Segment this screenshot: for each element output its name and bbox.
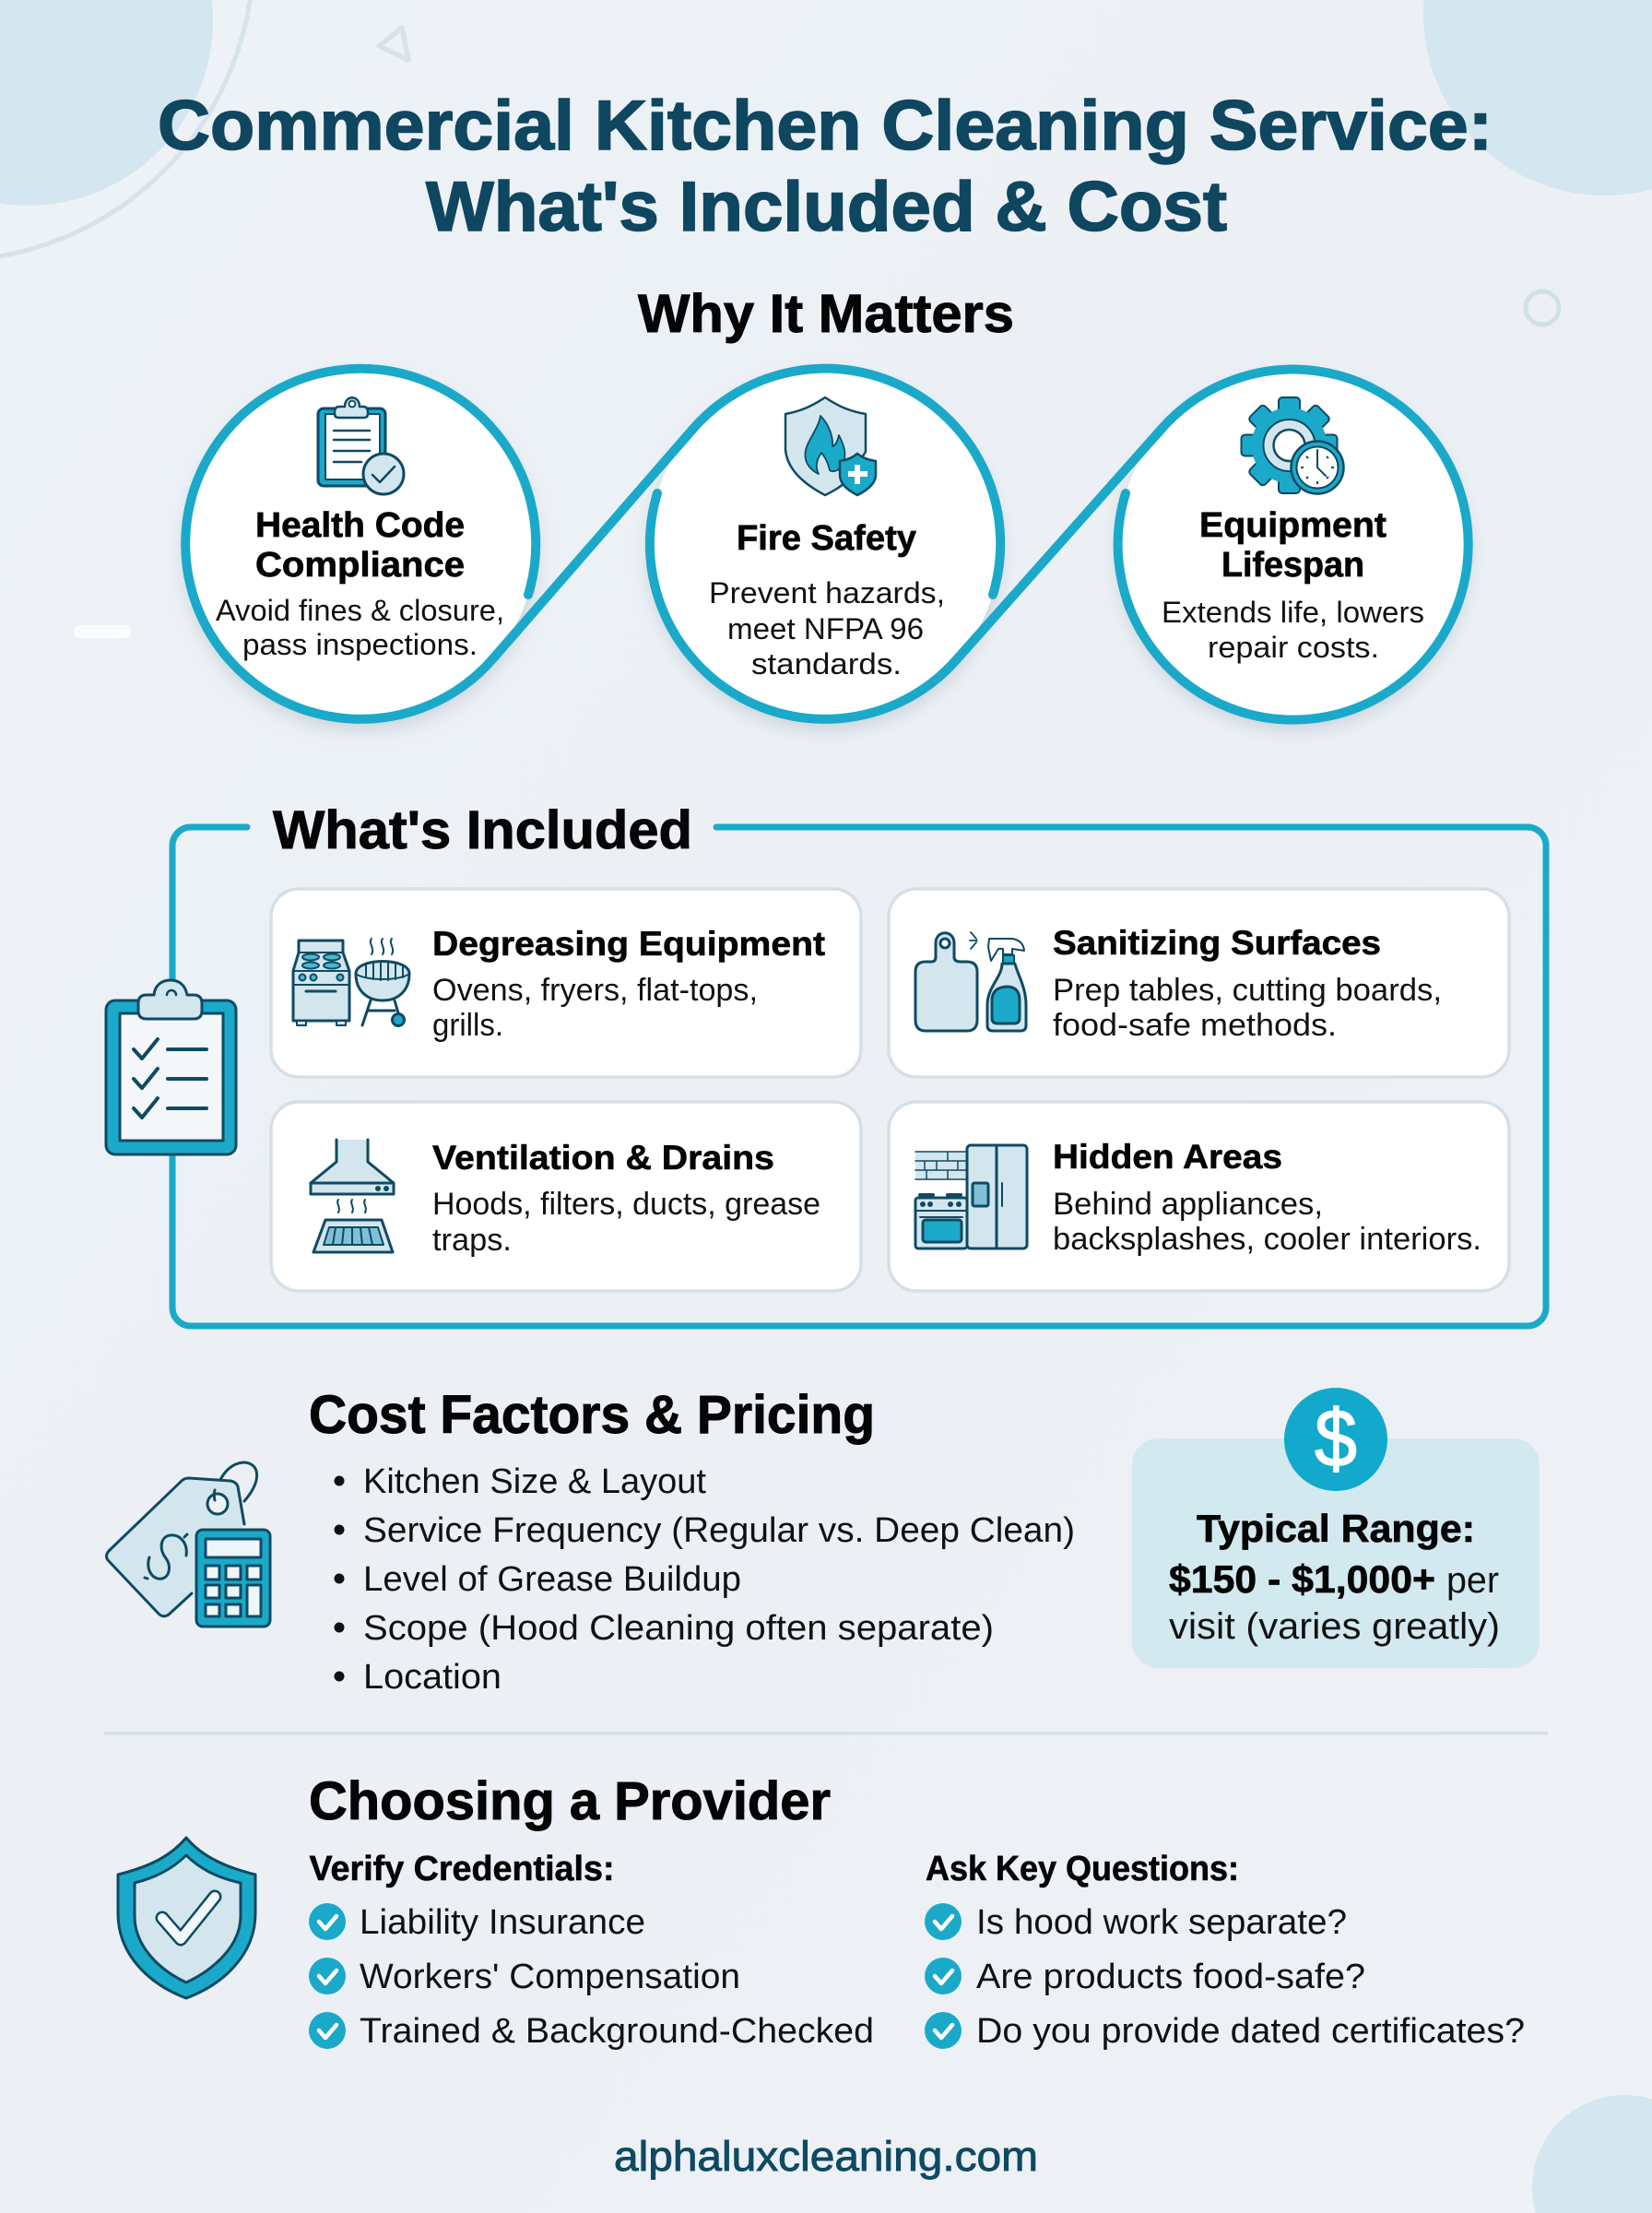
heading: what's included: What's Included: [273, 800, 692, 860]
list: cost factors: Kitchen Size & Layout: [363, 1462, 706, 1501]
list: ask key questions: Do you provide dated certificates?: [976, 2012, 1525, 2051]
frame: [172, 827, 1546, 1326]
text: equipment lifespan: Extends life, lowers: [1162, 596, 1424, 629]
card: ventilation and drains: [271, 1102, 861, 1291]
text: ventilation and drains: traps.: [432, 1223, 512, 1258]
title: Commercial Kitchen Cleaning Service:: [158, 87, 1493, 165]
list: cost factors: Service Frequency (Regular vs. Deep Clean): [363, 1511, 1075, 1550]
text: hidden areas: Behind appliances,: [1053, 1187, 1323, 1222]
icon: clipboard with check: [318, 397, 404, 494]
title: [158, 87, 1493, 246]
icon: large clipboard checklist: [106, 980, 236, 1154]
text: sanitizing surfaces: [1053, 924, 1442, 1043]
icon: fire shield: [785, 397, 876, 495]
title: What's Included & Cost: [426, 168, 1227, 246]
card: sanitizing surfaces: [889, 889, 1509, 1077]
list: verify credentials: [309, 1850, 874, 2051]
text: equipment lifespan: [1162, 506, 1424, 664]
text: hidden areas: [1053, 1138, 1481, 1257]
list: verify credentials: Liability Insurance: [360, 1903, 645, 1942]
icon: shield check: [118, 1838, 255, 1998]
text: health code compliance: pass inspections.: [242, 628, 478, 661]
icon: stove and grill: [293, 939, 409, 1025]
icon: price tag and calculator: [107, 1462, 270, 1627]
list: cost factors: Location: [363, 1658, 502, 1697]
list: ask key questions: Is hood work separate?: [976, 1903, 1347, 1942]
heading: why it matters: Why It Matters: [638, 284, 1014, 344]
section: what's included: [106, 800, 1546, 1326]
text: degreasing equipment: Ovens, fryers, flat-tops,: [432, 973, 758, 1008]
text: fire safety: meet NFPA 96: [727, 612, 924, 645]
text: health code compliance: Compliance: [255, 546, 465, 585]
list: cost factors: Scope (Hood Cleaning often separate): [363, 1609, 994, 1648]
text: fire safety: Fire Safety: [737, 519, 916, 558]
callout: typical range: [1132, 1388, 1540, 1668]
card: hidden areas: [889, 1102, 1509, 1291]
list: verify credentials: Trained & Background-Checked: [360, 2012, 874, 2051]
text: equipment lifespan: Equipment: [1199, 506, 1386, 545]
text: sanitizing surfaces: Sanitizing Surfaces: [1053, 924, 1381, 962]
text: price range: visit (varies greatly): [1169, 1606, 1500, 1647]
icon: dollar badge: $: [1315, 1392, 1357, 1484]
list: ask key questions: [925, 1850, 1525, 2051]
list: verify credentials: Workers' Compensation: [360, 1958, 740, 1996]
text: degreasing equipment: [432, 925, 825, 1043]
text: fire safety: standards.: [751, 647, 902, 680]
connecting ribbon from fire safety to equipment lifespan: [650, 370, 1469, 720]
text: price range: Typical Range:: [1197, 1507, 1475, 1550]
icon: fridge, oven and backsplash: [915, 1145, 1027, 1249]
icon: gear and clock: [1241, 397, 1344, 494]
list: verify credentials: Verify Credentials:: [310, 1850, 614, 1888]
text: hidden areas: backsplashes, cooler interiors.: [1053, 1222, 1481, 1257]
text: equipment lifespan: repair costs.: [1208, 631, 1379, 664]
text: ventilation and drains: Hoods, filters, ducts, grease: [432, 1187, 820, 1222]
icon: cutting board and spray bottle: [915, 932, 1026, 1031]
heading: cost factors & pricing: Cost Factors & Pricing: [309, 1385, 875, 1445]
text: price range: $150 - $1,000+: [1169, 1557, 1435, 1601]
text: health code compliance: Health Code: [255, 506, 465, 545]
divider: [104, 1732, 1548, 1735]
icon: dollar badge: [1284, 1388, 1387, 1491]
text: ventilation and drains: Ventilation & Drains: [432, 1139, 774, 1177]
text: health code compliance: Avoid fines & closure,: [216, 594, 504, 627]
section: why it matters circles: [185, 369, 1469, 720]
text: fire safety: Prevent hazards,: [709, 576, 945, 609]
text: fire safety: [709, 519, 945, 680]
list: cost factors: [334, 1462, 1075, 1697]
list: ask key questions: Ask Key Questions:: [926, 1850, 1239, 1888]
text: price range: [1169, 1507, 1500, 1647]
heading: choosing a provider: Choosing a Provider: [309, 1771, 831, 1831]
list: ask key questions: Are products food-safe?: [976, 1958, 1365, 1996]
list: cost factors: Level of Grease Buildup: [363, 1560, 741, 1599]
icon: hood and filter: [311, 1140, 394, 1252]
connecting ribbon from health code to fire safety: [185, 369, 1000, 719]
section: choosing a provider: [118, 1771, 1525, 2051]
text: equipment lifespan: Lifespan: [1221, 546, 1364, 585]
text: ventilation and drains: [432, 1139, 820, 1258]
text: degreasing equipment: grills.: [432, 1008, 503, 1043]
section: cost factors: [107, 1385, 1540, 1697]
text: hidden areas: Hidden Areas: [1053, 1138, 1282, 1176]
text: health code compliance: [216, 506, 504, 661]
text: sanitizing surfaces: Prep tables, cutting boards,: [1053, 973, 1442, 1008]
card: degreasing equipment: [271, 889, 861, 1077]
footer url: alphaluxcleaning.com: [614, 2133, 1038, 2180]
text: sanitizing surfaces: food-safe methods.: [1053, 1008, 1337, 1043]
text: price range: per: [1446, 1560, 1499, 1601]
text: degreasing equipment: Degreasing Equipment: [432, 925, 825, 963]
